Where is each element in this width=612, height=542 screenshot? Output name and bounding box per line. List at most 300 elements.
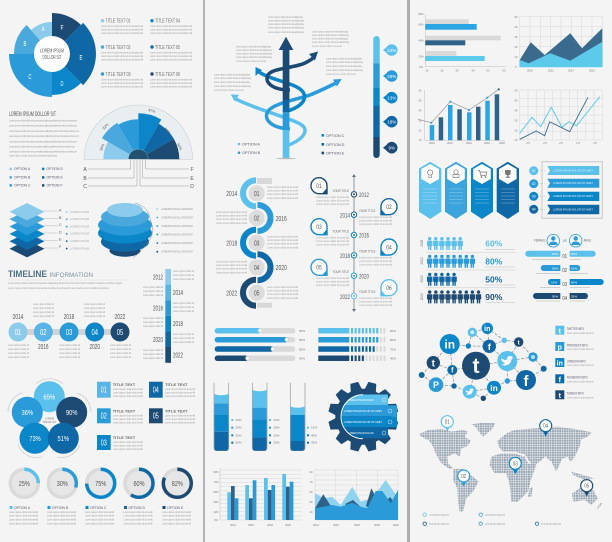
bar chart: 0% <box>214 518 219 522</box>
arrow annotations: Lorem ipsum dolor sit amet adipiscing <box>268 18 304 22</box>
area chart: 2014 <box>313 523 319 527</box>
layered diamond stack: A <box>59 208 62 212</box>
gear diagram: LOREM IPSUM DOLOR SIT AMET <box>344 420 382 424</box>
social legend: Lorem ipsum dolor sit amet <box>567 396 594 400</box>
bar chart: 2020 <box>285 523 291 527</box>
numbered titles: 01 <box>101 386 107 394</box>
numbered titles: TITLE TEXT <box>113 408 136 414</box>
legend: title text 03 <box>101 72 143 88</box>
stacked ellipsoid: LOREM IPSUM DOLLOR SIT AMET <box>161 224 193 228</box>
dotted world map <box>419 422 603 512</box>
horizontal timeline: Lorem ipsum dolor sit <box>110 355 131 359</box>
gender comparison: 30% <box>552 266 558 270</box>
pin timeline: 2016 <box>359 233 369 240</box>
horizontal bar chart: 30 <box>456 68 459 72</box>
vertical timeline: Lorem ipsum dolor sit <box>173 269 194 273</box>
arrow annotations: Lorem ipsum dolor sit amet adipiscing <box>268 22 304 26</box>
area chart: 50 <box>515 15 518 19</box>
semicircle fan chart: C <box>83 184 87 190</box>
text block: Lorem ipsum dolor sit amet consectetur adipiscing elit sed do eiusmod tempor <box>9 140 77 144</box>
snake timeline: 05 <box>254 290 260 297</box>
map legend: COUNTRY INFO 03 <box>485 522 506 526</box>
legend: title text 02 <box>101 45 143 62</box>
horizontal bar chart: 0% <box>419 65 424 69</box>
horizontal bar chart: 80% <box>418 12 424 16</box>
progress rings: 75% <box>95 479 106 488</box>
semicircle fan chart: D <box>190 184 194 190</box>
bar and line chart: 60 <box>419 88 422 92</box>
semicircle fan chart: F <box>190 167 194 173</box>
ring options legend: Lorem ipsum dolor sit amet elit <box>85 522 114 526</box>
area chart: 20 <box>515 45 518 49</box>
legend: title text 01: Lorem ipsum dolor sit amet consectetur elit <box>101 24 143 28</box>
snake timeline: Lorem ipsum dolor sit amet elit <box>216 210 247 214</box>
chevron list: 03 <box>532 195 536 199</box>
overlapping circles chart: 90% <box>66 408 78 417</box>
vertical timeline: 2018 <box>173 321 183 328</box>
people pictograms: 90% <box>485 292 503 302</box>
legend: title text 05 <box>150 45 192 62</box>
ring options legend: Lorem ipsum dolor sit amet elit <box>124 518 153 522</box>
test tube 1: 10% <box>236 418 242 422</box>
legend: options: OPTION B <box>14 176 31 180</box>
legend: title text 04: TITLE TEXT 04 <box>155 19 180 25</box>
pin timeline: Lorem ipsum dolor sit amet elit <box>359 218 392 222</box>
arrow annotations: Lorem ipsum dolor sit amet adipiscing <box>268 15 304 19</box>
arrow annotations: Lorem ipsum dolor sit amet adipiscing <box>326 64 362 68</box>
map legend <box>423 513 562 526</box>
test tube 3: 15% <box>311 426 317 430</box>
arrow annotations: Lorem ipsum dolor sit amet adipiscing <box>326 60 364 64</box>
ring options legend: Lorem ipsum dolor sit amet elit <box>47 522 76 526</box>
arrow annotations: Lorem ipsum dolor sit amet adipiscing <box>214 76 252 80</box>
arrow legend: OPTION A <box>242 142 260 146</box>
arrow annotations: Lorem ipsum dolor sit amet <box>312 44 342 48</box>
vertical timeline: Lorem ipsum dolor sit <box>173 340 194 344</box>
pin timeline: YOUR TITLE <box>359 208 376 213</box>
layered diamond stack: D <box>59 230 62 234</box>
heading: lorem ipsum: LOREM IPSUM DOLLOR SIT <box>9 111 56 118</box>
snake timeline: Lorem ipsum dolor sit amet elit <box>267 292 298 296</box>
pin timeline: 02 <box>386 204 392 211</box>
horizontal bar chart: 60 <box>503 68 506 72</box>
legend: title text 03: Lorem ipsum dolor sit amet consectetur elit <box>101 78 143 82</box>
ring options legend: Lorem ipsum dolor sit amet elit <box>85 510 114 514</box>
vertical timeline: 2022 <box>173 352 183 360</box>
pin timeline: Lorem ipsum dolor sit amet elit <box>359 300 392 304</box>
pin timeline: Lorem ipsum dolor sit amet elit <box>359 262 392 266</box>
map legend: COUNTRY INFO 01 <box>429 513 450 517</box>
progress rings: 25% <box>19 479 30 488</box>
people pictograms: 2008 <box>420 240 424 247</box>
area chart: 2012 <box>548 68 554 72</box>
chevron list: 01 <box>532 169 536 173</box>
area chart <box>515 15 602 72</box>
bar and line chart: 40 <box>419 108 422 112</box>
overlapping circles chart: 73% <box>29 434 41 443</box>
arrow legend <box>238 134 345 156</box>
icon: trophy <box>505 170 511 178</box>
ring options legend: OPTION A <box>14 506 31 510</box>
horizontal timeline: Lorem ipsum dolor sit <box>33 302 54 306</box>
vertical timeline: Lorem ipsum dolor sit <box>143 293 163 297</box>
pin timeline: Lorem ipsum dolor sit amet elit <box>359 296 392 300</box>
vertical timeline: Lorem ipsum dolor sit <box>173 273 194 277</box>
line chart: 2.5 <box>593 141 597 145</box>
pin timeline: YOUR TITLE <box>359 289 376 294</box>
legend: title text 01: Lorem ipsum dolor sit amet consectetur elit <box>101 31 143 35</box>
layered diamond stack <box>10 203 90 257</box>
line chart: 10 <box>515 138 518 142</box>
gender comparison: VS <box>563 239 567 243</box>
legend: title text 01: Lorem ipsum dolor sit amet consectetur elit <box>101 28 143 32</box>
map legend: COUNTRY INFO 05 <box>541 522 562 526</box>
legend: title text 04 <box>150 19 192 35</box>
bar and line chart: 2014 <box>466 141 472 145</box>
test tube 3 <box>290 383 317 451</box>
bar and line chart: 20 <box>419 128 422 132</box>
arrow legend: OPTION C <box>326 134 345 138</box>
people pictograms: 80% <box>485 256 503 266</box>
bar chart: 70% <box>213 480 219 484</box>
arrow annotations: Lorem ipsum dolor sit amet adipiscing <box>312 36 348 40</box>
numbered titles: TITLE TEXT <box>113 382 136 387</box>
vertical timeline <box>143 269 194 363</box>
horizontal timeline <box>8 302 131 359</box>
legend: title text 04: Lorem ipsum dolor sit amet consectetur elit <box>150 28 192 32</box>
icon: light bulb <box>428 170 433 177</box>
pin timeline: Lorem ipsum dolor sit amet elit <box>316 239 349 243</box>
heading: timeline: Lorem ipsum dolor sit amet consectetur adipiscing elit sed do eiusmod tempor incididunt ut labore et dolore magna <box>8 281 123 285</box>
semicircle fan chart: 47% <box>148 108 157 114</box>
gender comparison: 60% <box>552 252 558 256</box>
gender comparison <box>525 234 604 302</box>
map pin 02: 02 <box>461 474 466 480</box>
map pin 01: 01 <box>445 420 450 426</box>
social legend: Lorem ipsum dolor sit amet <box>567 363 594 367</box>
snake timeline <box>216 178 298 308</box>
vertical timeline: Lorem ipsum dolor sit <box>143 285 163 289</box>
social legend <box>555 326 594 400</box>
horizontal timeline: 04 <box>91 328 98 337</box>
arrow annotations: Lorem ipsum dolor sit amet adipiscing <box>312 30 348 34</box>
numbered titles: Lorem ipsum dolor sit amet elit <box>165 387 195 391</box>
semicircle fan chart: 56% <box>163 127 172 135</box>
horizontal timeline: 2018 <box>64 314 74 321</box>
bar and line chart: 50 <box>419 98 422 102</box>
pin timeline: 2018 <box>340 253 350 260</box>
overlapping circles chart <box>8 379 91 458</box>
social legend: Lorem ipsum dolor sit amet <box>567 379 594 383</box>
chevron list: LOREM IPSUM DOLOR SIT AMET <box>553 168 593 172</box>
layered diamond stack: LOREM IPSUM <box>70 224 90 228</box>
pin timeline: Lorem ipsum dolor sit amet elit <box>316 280 349 284</box>
tick bars: 80% <box>390 329 396 333</box>
gender comparison: MALE <box>584 238 592 242</box>
social legend: LINKEDIN INFO <box>567 359 586 363</box>
legend: title text 04: Lorem ipsum dolor sit amet consectetur elit <box>150 31 192 35</box>
horizontal timeline: Lorem ipsum dolor sit <box>33 314 54 318</box>
test tube 1: 20% <box>236 426 242 430</box>
social legend: TUMBLR INFO <box>567 392 584 396</box>
pin timeline <box>311 174 397 312</box>
arrow annotations: Lorem ipsum dolor sit amet adipiscing <box>236 55 272 59</box>
chevron list: LOREM IPSUM DOLOR SIT AMET <box>553 181 593 185</box>
line chart: 40 <box>515 108 518 112</box>
arrow annotations: Lorem ipsum dolor sit amet adipiscing <box>312 40 350 44</box>
horizontal timeline: Lorem ipsum dolor sit <box>8 347 29 351</box>
social network graph: f <box>451 368 454 374</box>
semicircle fan chart: 32% <box>102 122 110 131</box>
map pin 03: 03 <box>513 461 518 467</box>
semicircle fan chart: A <box>83 167 87 173</box>
layered diamond stack: LOREM IPSUM <box>70 246 90 250</box>
horizontal timeline: Lorem ipsum dolor sit <box>84 314 105 318</box>
legend: title text 06 <box>150 72 192 88</box>
gender comparison: 03 <box>562 282 567 288</box>
test tube 3: 35% <box>311 441 317 445</box>
map pin 04 <box>540 420 552 437</box>
legend: options <box>10 167 63 188</box>
numbered titles: Lorem ipsum dolor sit amet elit <box>165 417 195 421</box>
text block: Lorem ipsum dolor sit amet consectetur adipiscing elit sed do eiusmod tempor <box>9 118 77 122</box>
social legend: f <box>559 377 562 384</box>
snake timeline: Lorem ipsum dolor sit amet elit <box>216 266 247 270</box>
stacked ellipsoid: LOREM IPSUM DOLLOR SIT AMET <box>161 241 193 245</box>
horizontal timeline: Lorem ipsum dolor sit <box>84 302 105 306</box>
vertical timeline: 2012 <box>153 274 163 282</box>
numbered titles: Lorem ipsum dolor sit amet elit <box>165 394 195 398</box>
chevron list: LOREM IPSUM DOLOR SIT AMET <box>553 207 593 211</box>
horizontal timeline: Lorem ipsum dolor sit <box>8 343 29 347</box>
horizontal bar chart: 20 <box>441 68 444 72</box>
vertical timeline: 2020 <box>153 337 163 344</box>
snake timeline: Lorem ipsum dolor sit amet elit <box>216 214 247 218</box>
line chart: 2.5 <box>526 141 530 145</box>
bar and line chart: 2012 <box>447 141 453 145</box>
snake timeline: Lorem ipsum dolor sit amet elit <box>267 246 298 250</box>
ring options legend: OPTION B <box>52 506 69 510</box>
horizontal timeline: Lorem ipsum dolor sit <box>8 351 29 355</box>
test tube 3: 45% <box>311 433 317 437</box>
map pin 05: 05 <box>584 484 589 490</box>
area chart: 2020 <box>374 523 380 527</box>
area chart: 30 <box>310 500 313 504</box>
gender comparison: 02 <box>562 268 567 274</box>
horizontal timeline: Lorem ipsum dolor sit <box>33 310 54 314</box>
vertical timeline: 2016 <box>153 306 163 312</box>
overlapping circles chart: 65% <box>44 392 55 402</box>
line chart: 30 <box>515 118 518 122</box>
overlapping circles chart: 36% <box>22 408 33 417</box>
ring options legend: Lorem ipsum dolor sit amet elit <box>162 518 191 522</box>
area chart: 2016 <box>589 68 595 72</box>
overlapping circles chart: IPSUM SIT <box>43 420 56 424</box>
vertical timeline: Lorem ipsum dolor sit <box>173 305 194 309</box>
vertical timeline: Lorem ipsum dolor sit <box>173 301 194 305</box>
legend: options: OPTION D <box>46 167 63 171</box>
people pictograms: 60% <box>485 239 503 249</box>
legend: title text 06: Lorem ipsum dolor sit amet consectetur elit <box>150 84 192 88</box>
gender comparison: 50% <box>571 252 577 256</box>
legend: options: OPTION A <box>14 167 31 171</box>
donut chart: D <box>60 81 64 88</box>
stacked ellipsoid <box>98 203 193 258</box>
legend: title text 05: Lorem ipsum dolor sit amet consectetur elit <box>150 50 192 54</box>
legend: title text 02: TITLE TEXT 02 <box>106 45 131 51</box>
legend: title text 01: TITLE TEXT 01 <box>106 19 131 25</box>
bar chart: 2016 <box>248 523 254 527</box>
map pin 01 <box>441 416 453 432</box>
arrow legend: OPTION D <box>326 143 345 147</box>
horizontal timeline: 02 <box>40 328 47 337</box>
legend: title text 02: Lorem ipsum dolor sit amet consectetur elit <box>101 58 143 62</box>
legend: title text 05: Lorem ipsum dolor sit amet consectetur elit <box>150 54 192 58</box>
semicircle fan chart: 56% <box>99 142 106 151</box>
gear diagram: LOREM IPSUM DOLOR SIT AMET <box>344 409 382 413</box>
area chart: 2018 <box>354 523 360 527</box>
bar chart: 10% <box>213 510 219 514</box>
legend: title text 04: Lorem ipsum dolor sit amet consectetur elit <box>150 24 192 28</box>
bar chart <box>213 468 302 527</box>
ring options legend: Lorem ipsum dolor sit amet elit <box>47 514 76 518</box>
semicircle fan chart: 54% <box>176 143 183 152</box>
layered diamond stack: LOREM IPSUM <box>70 217 90 221</box>
legend: title text 06: TITLE TEXT 06 <box>155 72 180 78</box>
test tube 1: 25% <box>236 433 242 437</box>
horizontal timeline: Lorem ipsum dolor sit <box>33 306 54 310</box>
ring options legend: OPTION D <box>128 506 145 510</box>
stacked ellipsoid: LOREM IPSUM DOLLOR SIT AMET <box>161 215 193 219</box>
pin timeline: 2014 <box>340 212 350 220</box>
horizontal bar chart: 50 <box>487 68 490 72</box>
map pin 04: 04 <box>543 424 548 430</box>
pin timeline: 01 <box>316 183 322 190</box>
horizontal timeline: Lorem ipsum dolor sit <box>110 343 131 347</box>
gear diagram: LOREM IPSUM DOLOR <box>348 398 374 402</box>
pin timeline: Lorem ipsum dolor sit amet elit <box>359 256 392 260</box>
pin timeline: 03 <box>316 224 322 231</box>
donut chart: E <box>80 55 83 62</box>
numbered titles: Lorem ipsum dolor sit amet elit <box>113 417 143 421</box>
ring options legend: Lorem ipsum dolor sit amet elit <box>47 518 76 522</box>
arrow annotations: Lorem ipsum dolor sit amet adipiscing <box>214 72 250 76</box>
pin timeline: YOUR TITLE <box>332 188 349 193</box>
area chart: 10 <box>515 55 518 59</box>
bar chart: 2018 <box>267 523 273 527</box>
bar chart: 30% <box>213 500 219 504</box>
test tube 2 <box>252 383 280 451</box>
bar chart: 90% <box>213 470 219 474</box>
ring options legend <box>9 506 191 526</box>
line chart: 60 <box>515 88 518 92</box>
social network graph: in <box>444 338 455 352</box>
area chart: 2010 <box>527 68 533 72</box>
numbered titles: Lorem ipsum dolor sit amet elit <box>113 420 143 424</box>
test tube 2: 18% <box>274 426 280 430</box>
slider bars: 40% <box>299 357 305 361</box>
layered diamond stack: E <box>59 238 62 242</box>
arrow annotations: Lorem ipsum dolor sit amet adipiscing <box>236 44 272 48</box>
icon: badge <box>453 170 459 178</box>
heading: timeline: Lorem ipsum dolor sit amet consectetur adipiscing elit sed do eiusmod tempor incididunt ut labore <box>8 286 110 290</box>
snake timeline: Lorem ipsum dolor sit amet elit <box>267 185 298 189</box>
pin timeline: Lorem ipsum dolor sit amet elit <box>316 195 349 199</box>
line chart: 20 <box>515 128 518 132</box>
vertical timeline: Lorem ipsum dolor sit <box>143 348 163 352</box>
tick bars: 70% <box>390 348 396 352</box>
arrow annotations: Lorem ipsum dolor sit amet <box>236 59 266 63</box>
numbered titles: Lorem ipsum dolor sit amet elit <box>113 447 143 451</box>
snake timeline: Lorem ipsum dolor sit amet elit <box>267 285 298 289</box>
map legend: COUNTRY INFO 02 <box>429 522 450 526</box>
horizontal timeline: Lorem ipsum dolor sit <box>59 343 80 347</box>
semicircle fan chart: E <box>190 176 194 182</box>
numbered titles <box>97 382 195 451</box>
numbered titles: Lorem ipsum dolor sit amet elit <box>113 444 143 448</box>
area chart: 2022 <box>393 523 399 527</box>
people pictograms: 2022 <box>420 293 424 300</box>
layered diamond stack: F <box>59 245 62 249</box>
line chart <box>515 88 602 145</box>
vertical timeline: Lorem ipsum dolor sit <box>173 277 194 281</box>
layered diamond stack: LOREM IPSUM <box>70 232 90 236</box>
test tube 1 <box>214 383 242 451</box>
arrow annotations: Lorem ipsum dolor sit amet adipiscing <box>214 80 250 84</box>
gender comparison: 01 <box>562 254 567 260</box>
legend: options: OPTION E <box>46 176 63 180</box>
horizontal timeline: 2020 <box>89 344 100 351</box>
slider bars: 65% <box>299 348 305 352</box>
snake timeline: Lorem ipsum dolor sit amet elit <box>216 221 247 225</box>
horizontal timeline: Lorem ipsum dolor sit <box>8 355 29 359</box>
horizontal timeline: 2016 <box>38 344 49 351</box>
social legend: t <box>559 393 562 400</box>
pin timeline: 2012 <box>359 192 369 199</box>
snake timeline: 02 <box>254 216 260 223</box>
vertical timeline: Lorem ipsum dolor sit <box>143 320 163 324</box>
area chart: 10 <box>310 510 313 514</box>
stacked ellipsoid: LOREM IPSUM DOLLOR SIT AMET <box>161 250 193 254</box>
social network graph: P <box>433 380 439 390</box>
social network graph: in <box>484 326 490 333</box>
arrow annotations: Lorem ipsum dolor sit amet adipiscing <box>268 30 304 34</box>
vertical segmented bar with drops: 22% <box>387 48 396 53</box>
numbered titles: Lorem ipsum dolor sit amet elit <box>113 440 143 444</box>
ring options legend: Lorem ipsum dolor sit amet elit <box>124 514 153 518</box>
heading: timeline: INFORMATION <box>50 272 93 279</box>
pin timeline: Lorem ipsum dolor sit amet elit <box>359 259 392 263</box>
vertical segmented bar with drops: 9% <box>388 146 395 150</box>
horizontal bar chart: 40% <box>418 38 424 42</box>
snake timeline: Lorem ipsum dolor sit amet elit <box>267 238 298 242</box>
legend: title text 03: TITLE TEXT 03 <box>106 72 131 78</box>
ring options legend: Lorem ipsum dolor sit amet elit <box>9 514 38 518</box>
vertical timeline: Lorem ipsum dolor sit <box>143 289 163 293</box>
horizontal timeline: Lorem ipsum dolor sit <box>59 351 80 355</box>
legend: title text 03: Lorem ipsum dolor sit amet consectetur elit <box>101 81 143 85</box>
snake timeline: Lorem ipsum dolor sit amet elit <box>267 234 298 238</box>
legend: title text 02: Lorem ipsum dolor sit amet consectetur elit <box>101 50 143 54</box>
legend: title text 01 <box>101 19 143 35</box>
layered diamond stack: LOREM IPSUM <box>70 239 90 243</box>
vertical timeline: Lorem ipsum dolor sit <box>173 332 194 336</box>
gear diagram <box>328 381 399 452</box>
arrow annotations: Lorem ipsum dolor sit amet <box>326 72 356 76</box>
tick bars <box>318 328 396 361</box>
twisted arrows <box>231 37 342 159</box>
bar and line chart: 30 <box>419 118 422 122</box>
